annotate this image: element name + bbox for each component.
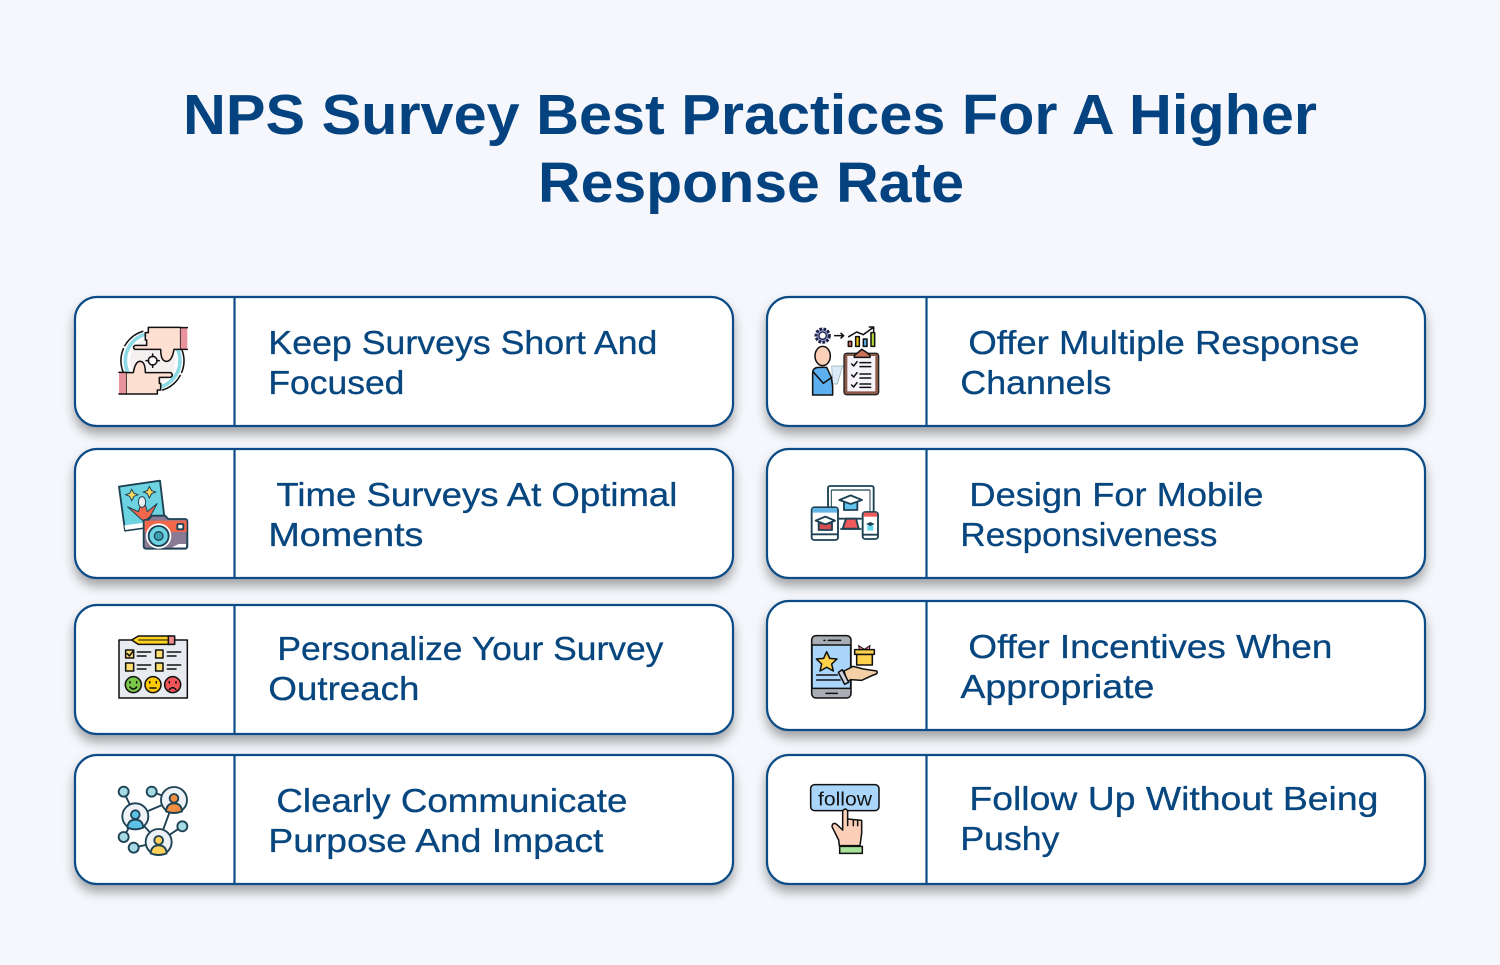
- card: Offer Incentives When Appropriate: [767, 601, 1425, 730]
- text: Time Surveys At Optimal Moments: Moments: [268, 516, 423, 553]
- text: Offer Multiple Response Channels: [960, 324, 1359, 401]
- text: Offer Incentives When Appropriate: Appropriate: [960, 668, 1154, 705]
- text: Design For Mobile Responsiveness: Responsiveness: [960, 516, 1217, 553]
- text: Offer Multiple Response Channels: Channels: [960, 364, 1111, 401]
- icon: photo and camera: [119, 481, 187, 549]
- card: Offer Multiple Response Channels: [767, 297, 1425, 426]
- text: Design For Mobile Responsiveness: Design For Mobile: [969, 476, 1263, 513]
- text: Offer Incentives When Appropriate: Offer Incentives When: [968, 628, 1332, 665]
- text: Time Surveys At Optimal Moments: Time Surveys At Optimal: [276, 476, 677, 513]
- text: Follow Up Without Being Pushy: [960, 780, 1378, 857]
- icon: phone with star and gift: [812, 636, 877, 698]
- icon: people network: [119, 787, 187, 855]
- text: Keep Surveys Short And Focused: [268, 324, 657, 401]
- card: Clearly Communicate Purpose And Impact: [75, 755, 733, 884]
- icon: follow button with pointing hand: follow: [818, 789, 872, 810]
- text: Follow Up Without Being Pushy: Follow Up Without Being: [969, 780, 1378, 817]
- text: Offer Multiple Response Channels: Offer Multiple Response: [968, 324, 1359, 361]
- text: Design For Mobile Responsiveness: [960, 476, 1263, 553]
- card: Personalize Your Survey Outreach: [75, 605, 733, 734]
- title: Response Rate: [538, 151, 964, 215]
- text: Clearly Communicate Purpose And Impact: [268, 782, 627, 859]
- text: Clearly Communicate Purpose And Impact: Clearly Communicate: [276, 782, 627, 819]
- card: Follow Up Without Being Pushy: [767, 755, 1425, 884]
- card: Keep Surveys Short And Focused: [75, 297, 733, 426]
- icon: feedback form with smileys: [119, 636, 187, 698]
- text: Personalize Your Survey Outreach: [268, 630, 664, 707]
- text: Keep Surveys Short And Focused: Keep Surveys Short And: [268, 324, 657, 361]
- text: Clearly Communicate Purpose And Impact: Purpose And Impact: [268, 822, 603, 859]
- text: Keep Surveys Short And Focused: Focused: [268, 364, 404, 401]
- text: Follow Up Without Being Pushy: Pushy: [960, 820, 1060, 857]
- card: Design For Mobile Responsiveness: [767, 449, 1425, 578]
- text: Personalize Your Survey Outreach: Outreach: [268, 670, 419, 707]
- text: Offer Incentives When Appropriate: [960, 628, 1332, 705]
- text: Personalize Your Survey Outreach: Personalize Your Survey: [277, 630, 664, 667]
- icon: analyst with checklist: [813, 327, 879, 395]
- title: NPS Survey Best Practices For A Higher: [183, 83, 1317, 147]
- icon: framing hands and target: [119, 327, 187, 394]
- icon: responsive devices: [812, 486, 878, 540]
- title: [183, 83, 1317, 215]
- text: Time Surveys At Optimal Moments: [268, 476, 677, 553]
- icon: follow button with pointing hand: [811, 785, 879, 853]
- card: Time Surveys At Optimal Moments: [75, 449, 733, 578]
